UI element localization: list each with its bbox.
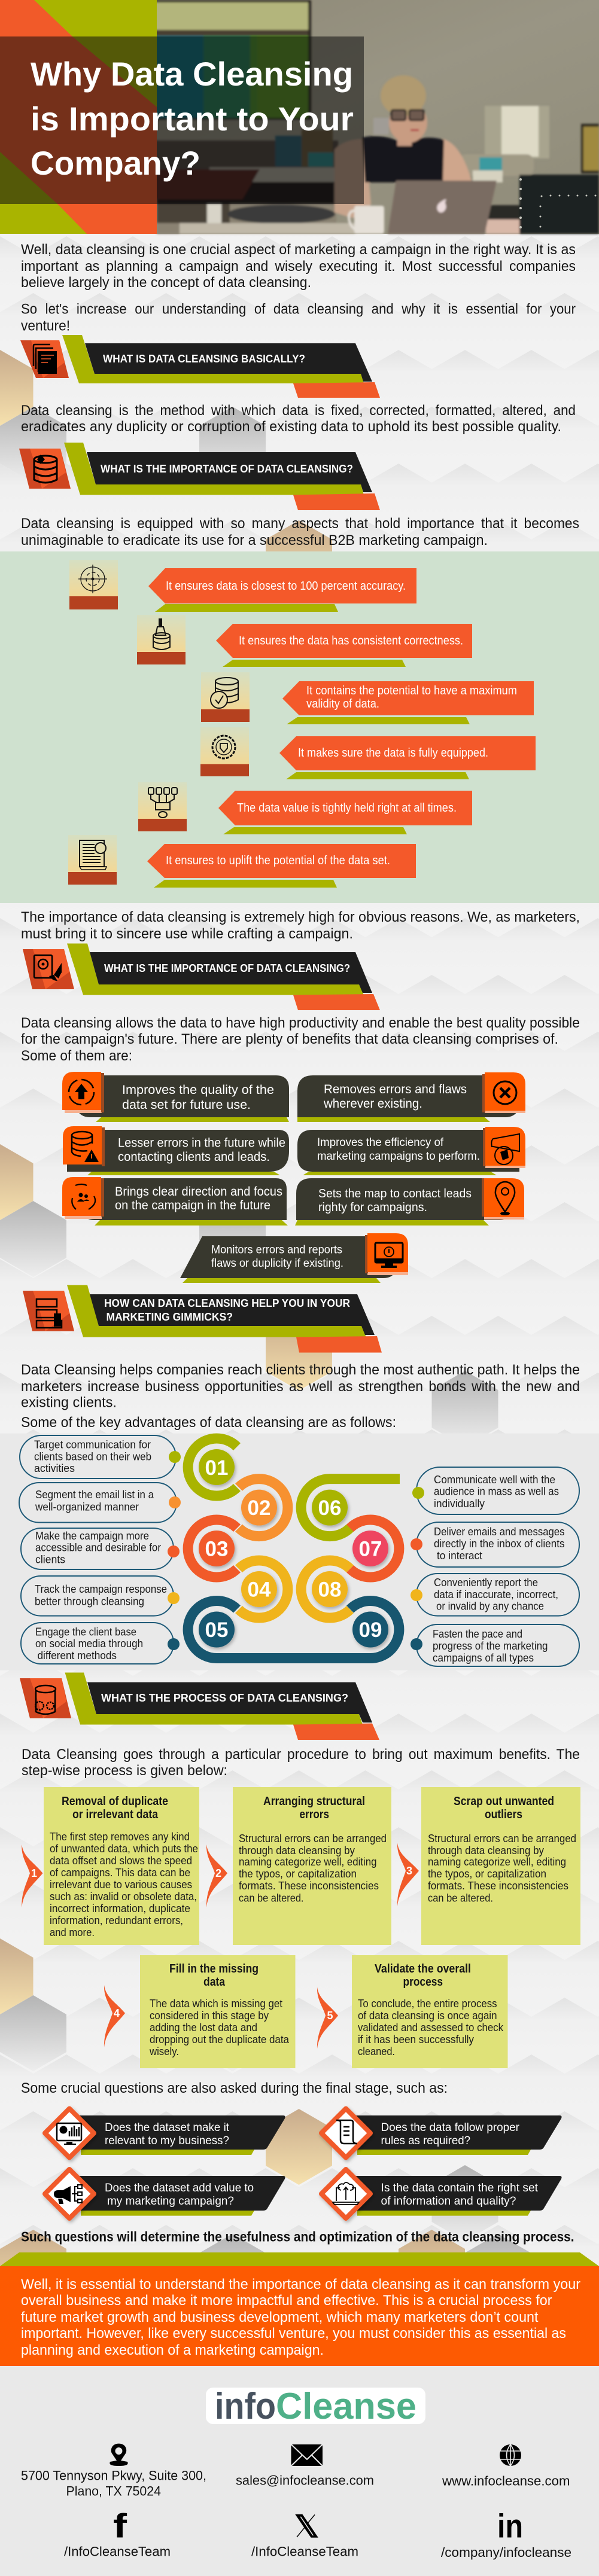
paragraph: productivity: Some of them are: [21,1048,132,1064]
question cards [45,2109,562,2218]
item 1: accuracy [69,560,416,612]
step 1 box: and more. [50,1926,95,1938]
card: monitors errors: flaws or duplicity if existing. [211,1257,343,1270]
step 1 box: of campaigns. This data can be [50,1867,190,1879]
step 4 box: The data which is missing get [150,1998,282,2010]
logo [206,2386,425,2427]
logo: Cleanse [276,2386,416,2427]
panel: conclusion [0,2252,599,2366]
panel: conclusion: planning and execution of a marketing campaign. [21,2342,324,2358]
paragraph: marketers: The importance of data cleansing is extremely high for obvious reasons. We, as marketers, [21,909,580,925]
paragraph: marketers: must bring it to sincere use while crafting a campaign. [21,926,353,942]
arrow 1 [22,1845,43,1907]
section heading: how can data cleansing help: MARKETING GIMMICKS? [107,1310,233,1323]
address [21,2444,206,2499]
left callouts [19,1435,181,1664]
step 3 box: outliers [485,1808,522,1821]
numbered circles [199,1449,388,1647]
item 2: correctness [137,615,472,667]
icon: server and broom [23,1291,74,1331]
icon: documents [20,340,69,378]
step 4 box: dropping out the duplicate data [150,2034,290,2045]
section heading: what is data cleansing basically [20,335,380,398]
section heading: importance of data cleansing (second): WHAT IS THE IMPORTANCE OF DATA CLEANSING? [104,962,350,974]
item 3: validity [201,672,534,724]
website [442,2444,570,2488]
item 2: correctness: It ensures the data has consistent correctness. [239,634,463,647]
left callouts: Track the campaign response [35,1583,167,1595]
section heading: importance of data cleansing: WHAT IS THE IMPORTANCE OF DATA CLEANSING? [101,462,353,475]
item 4: equipped: It makes sure the data is fully equipped. [298,746,488,760]
panel: data cleansing assurances [0,551,599,903]
icon: facebook: f [113,2507,127,2545]
card: removes errors: Removes errors and flaws [324,1083,467,1096]
step 3 box: Structural errors can be arranged [428,1833,576,1845]
step 1 box: data offset and slows the speed [50,1855,192,1867]
paragraph: definition: eradicates any duplicity or corruption of existing data to uphold its best possible quality. [21,419,561,435]
card: improves quality: data set for future use. [122,1098,251,1112]
section heading: importance of data cleansing [19,443,380,510]
question 2: Does the data follow proper [381,2121,520,2134]
left callouts: clients based on their web [34,1451,151,1463]
item 5: value [138,782,472,834]
step 5 box: To conclude, the entire process [358,1998,497,2010]
paragraph: step-wise process: step-wise process is given below: [22,1763,227,1779]
card: lesser errors [63,1126,289,1175]
geometric olive and orange shapes [0,0,157,234]
address: 5700 Tennyson Pkwy, Suite 300, [21,2468,206,2483]
panel: conclusion: future market growth and business development, which many marketers don’t count [21,2309,539,2325]
item 5: value: The data value is tightly held right at all times. [237,801,457,815]
right callouts: to interact [437,1550,482,1562]
step 3 box: can be altered. [428,1892,493,1904]
step 1 box: Removal of duplicate [62,1795,168,1808]
step 3 box: naming categorize well, editing [428,1856,566,1868]
question 1: Does the dataset make it [105,2121,230,2134]
right callouts [411,1467,579,1666]
card: sets the map [295,1178,524,1225]
step 3 box: formats. These inconsistencies [428,1880,568,1892]
icon: megaphone network [45,2169,94,2218]
section heading: process of data cleansing: WHAT IS THE PROCESS OF DATA CLEANSING? [101,1691,348,1704]
item 3: validity: validity of data. [306,697,379,711]
linkedin [441,2507,571,2560]
right callouts: progress of the marketing [433,1640,548,1652]
paragraph: reach clients [21,1362,580,1431]
card: clear direction: Brings clear direction and focus [115,1185,282,1199]
icon: circular upload [62,1072,101,1110]
step 5 box: Validate the overall [375,1962,471,1976]
step 3 box [421,1787,580,1945]
card: monitors errors [180,1233,408,1283]
step 2 box: errors [299,1808,329,1821]
x: /InfoCleanseTeam [251,2544,358,2559]
right callouts: Fasten the pace and [433,1628,522,1640]
numbered circles: 03 [205,1537,228,1561]
paragraph: reach clients: existing clients. [21,1395,117,1410]
numbered circles: 09 [359,1618,382,1642]
item 4: equipped [200,727,536,779]
facebook: /InfoCleanseTeam [64,2544,171,2559]
question 3: my marketing campaign? [107,2195,234,2208]
card: improves quality [62,1072,289,1122]
numbered circles: 08 [318,1578,341,1602]
question 1: relevant to my business? [105,2135,229,2147]
step 4 box: wisely. [149,2045,179,2057]
step 1 box: information, redundant errors, [50,1915,183,1926]
paragraph: step-wise process [22,1746,580,1779]
card: removes errors: wherever existing. [323,1097,422,1111]
question 1 [45,2109,285,2158]
arrow 3 [397,1843,419,1906]
step 1 box [44,1787,199,1945]
item 3: validity: It contains the potential to have a maximum [306,684,517,697]
card: sets the map: Sets the map to contact leads [318,1187,472,1200]
paragraph: productivity: for the campaign's future. There are plenty of benefits that data cleansing comprises of. [21,1031,558,1047]
intro text: Well, data cleansing is one crucial aspect of marketing a campaign in the right way. It is as [21,242,576,258]
right callouts: data if inaccurate, incorrect, [434,1589,558,1601]
section heading: process of data cleansing [20,1672,379,1740]
arrow 2 [206,1845,227,1907]
paragraph: reach clients: Data Cleansing helps companies reach clients through the most authentic path. It helps the [21,1362,580,1378]
arrow 4 [104,1985,125,2047]
step 5 box: cleaned. [358,2045,395,2057]
left callouts: activities [34,1462,75,1474]
left callouts: clients [35,1554,65,1566]
title: Why Data Cleansing [31,55,353,93]
icon: brush and database [137,615,186,664]
step 2 box: can be altered. [239,1892,304,1904]
left callouts: well-organized manner [35,1501,139,1513]
arrow 3: 3 [406,1865,412,1877]
icon: database with check [201,672,250,722]
icon: envelope [291,2444,323,2466]
step 3 box: the typos, or capitalization [428,1868,546,1880]
step 4 box: considered in this stage by [150,2010,269,2022]
website: www.infocleanse.com [442,2474,570,2488]
numbered circles: 02 [248,1496,270,1520]
question 4: of information and quality? [381,2195,516,2208]
icon: audience focus [62,1177,101,1216]
item 6: potential: It ensures to uplift the potential of the data set. [166,854,390,867]
icon: data network [138,782,187,831]
numbered circles: 07 [359,1537,382,1561]
card: clear direction: on the campaign in the future [115,1199,270,1212]
icon: database gears [20,1678,71,1718]
step 2 box: through data cleansing by [239,1845,355,1856]
icon: dashboard monitor [45,2109,94,2158]
left callouts: Engage the client base [35,1626,136,1638]
step 3 box: through data cleansing by [428,1845,544,1856]
intro text: believe largely in the concept of data cleansing. [21,275,311,291]
title: Company? [31,144,200,182]
arrow 1: 1 [31,1867,37,1879]
step 5 box: of data cleansing is once again [358,2010,497,2022]
arrow 5: 5 [327,2010,333,2022]
intro text [21,242,576,334]
icon: database warning [63,1126,102,1164]
section heading: importance of data cleansing (second) [23,944,380,1010]
panel: key advantages diagram [0,1434,599,1670]
x [251,2514,358,2559]
icon: gear shield [200,727,249,776]
step 4 box: data [203,1976,226,1989]
icon: hard disk and broom [23,949,74,989]
icon: cloud laptop [321,2169,370,2218]
left callouts: Segment the email list in a [35,1489,154,1501]
step 2 box [233,1787,391,1945]
right callouts: audience in mass as well as [434,1486,559,1498]
facebook [64,2507,171,2559]
icon: x [296,2514,317,2537]
left callouts: Make the campaign more [35,1530,149,1542]
numbered circles: 01 [205,1456,228,1480]
right callouts: or invalid by any chance [436,1601,544,1612]
dark title overlay [0,36,364,204]
item 6: potential [68,835,416,888]
hero banner [0,0,599,234]
address: Plano, TX 75024 [66,2484,161,2499]
card: monitors errors: Monitors errors and reports [211,1243,342,1256]
panel: conclusion: overall business and make it more impactful and effective. This is a crucial process for [21,2293,552,2309]
step 5 box: validated and assessed to check [358,2022,504,2034]
left callouts: on social media through [35,1638,143,1650]
paragraph: definition [21,403,576,435]
icon: linkedin: in [497,2507,523,2544]
step 3 box: Scrap out unwanted [454,1795,554,1808]
right callouts: Communicate well with the [434,1474,555,1486]
step 1 box: or irrelevant data [72,1808,159,1821]
card: clear direction [62,1177,288,1225]
panel: conclusion: important. However, like every successful venture, you must consider this as essential as [21,2325,566,2342]
right callouts: Conveniently report the [434,1577,538,1589]
card: improves efficiency: Improves the efficiency of [317,1136,444,1149]
panel: conclusion: Well, it is essential to understand the importance of data cleansing as it can transform your [21,2276,580,2293]
icon: target [69,560,118,609]
step 4 box: adding the lost data and [150,2022,257,2034]
card: lesser errors: contacting clients and leads. [118,1150,270,1164]
icon: database [19,449,71,489]
step 1 box: irrelevant due to various causes [50,1879,192,1891]
question 2 [321,2109,562,2158]
item 1: accuracy: It ensures data is closest to 100 percent accuracy. [166,580,406,593]
step 5 box: if it has been successfully [358,2034,474,2045]
paragraph: reach clients: Some of the key advantages of data cleansing are as follows: [21,1414,396,1431]
icon: scroll checklist [321,2109,370,2158]
left callouts: better through cleansing [35,1596,144,1608]
step 1 box: of unwanted data, which puts the [50,1843,198,1855]
icon: megaphone [485,1127,525,1166]
card: removes errors [297,1072,525,1122]
benefit cards [62,1072,525,1283]
paragraph: aspects: Data cleansing is equipped with so many aspects that hold importance that it becomes [21,516,579,532]
paragraph: aspects [21,516,579,548]
question 3 [45,2169,285,2218]
step 5 box: process [403,1976,443,1989]
arrow 5 [317,1987,338,2048]
step 4 box: Fill in the missing [169,1962,259,1976]
email: sales@infocleanse.com [236,2473,374,2488]
question 4: Is the data contain the right set [381,2182,539,2194]
step 4 box [140,1955,296,2068]
right callouts: directly in the inbox of clients [434,1538,565,1550]
left callouts: accessible and desirable for [35,1542,161,1554]
process steps [22,1787,580,2068]
linkedin: /company/infocleanse [441,2545,571,2560]
arrow 2: 2 [215,1867,221,1879]
paragraph: productivity [21,1015,580,1064]
question 3: Does the dataset add value to [105,2182,254,2194]
step 1 box: incorrect information, duplicate [50,1903,190,1915]
logo: info [215,2386,276,2427]
paragraph: reach clients: marketers increase business opportunities as well as strengthen bonds with the new and [21,1379,580,1395]
step 5 box [352,1955,507,2068]
step 2 box: naming categorize well, editing [239,1856,377,1868]
card: improves quality: Improves the quality of the [122,1083,274,1097]
paragraph: crucial questions: Some crucial questions are also asked during the final stage, such as: [21,2080,448,2096]
arrow 4: 4 [114,2007,120,2019]
paragraph: step-wise process: Data Cleansing goes through a particular procedure to bring out maximum benefits. The [22,1746,580,1763]
step 2 box: formats. These inconsistencies [239,1880,379,1892]
step 1 box: The first step removes any kind [50,1831,190,1843]
question 2: rules as required? [381,2135,470,2147]
step 1 box: such as: invalid or obsolete data, [50,1891,197,1903]
section heading: how can data cleansing help [23,1285,382,1353]
paragraph: marketers [21,909,580,942]
intro text: venture! [21,318,70,334]
numbered circles: 05 [205,1618,228,1642]
section heading: what is data cleansing basically: WHAT IS DATA CLEANSING BASICALLY? [103,352,305,365]
title: is Important to Your [31,100,354,138]
numbered circles: 04 [248,1578,271,1602]
section heading: how can data cleansing help: HOW CAN DATA CLEANSING HELP YOU IN YOUR [104,1297,350,1309]
right callouts: campaigns of all types [433,1652,534,1664]
left callouts: Target communication for [34,1439,151,1451]
step 2 box: Arranging structural [263,1795,365,1808]
step 2 box: the typos, or capitalization [239,1868,357,1880]
icon: data report [68,835,117,885]
numbered circles: 06 [318,1496,341,1520]
icon: monitor alert [367,1233,408,1272]
right callouts: Deliver emails and messages [434,1526,565,1538]
icon: cross in circle [485,1072,525,1111]
footer [0,2366,599,2576]
intro text: important as planning a campaign and wisely executing it. Most successful companies [21,258,576,275]
question 4 [321,2169,562,2218]
email [236,2444,374,2488]
paragraph: aspects: unimaginable to eradicate its use for a successful B2B marketing campaign. [21,532,488,548]
card: improves efficiency [297,1127,525,1175]
serpentine ring chart [188,1438,400,1658]
step 2 box: Structural errors can be arranged [239,1833,387,1845]
paragraph: definition: Data cleansing is the method with which data is fixed, corrected, formatted, altered, and [21,403,576,419]
right callouts: individually [434,1498,485,1510]
hero photo: woman working on laptop [0,0,599,234]
icon: globe [500,2444,521,2466]
left callouts: different methods [37,1650,117,1662]
paragraph: productivity: Data cleansing allows the data to have high productivity and enable the best quality possible [21,1015,580,1031]
icon: map pin [484,1178,524,1217]
icon: location pin [110,2444,128,2466]
title [31,55,354,182]
card: sets the map: righty for campaigns. [318,1201,427,1214]
card: improves efficiency: marketing campaigns to perform. [317,1150,480,1163]
card: lesser errors: Lesser errors in the future while [118,1136,285,1150]
